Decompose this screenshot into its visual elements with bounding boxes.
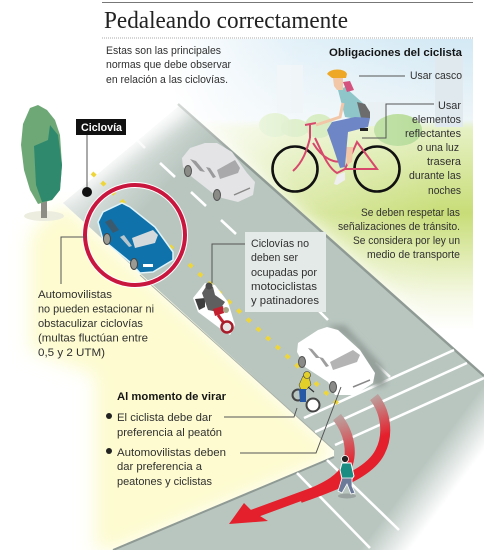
- text: traffic signals: [338, 207, 460, 261]
- text: motorists: Automovilistas: [38, 289, 112, 301]
- callout: bike lanes not for motorcycles: deben ser: [251, 252, 298, 264]
- road: [35, 85, 484, 550]
- label: reflective elements: o una luz: [417, 142, 459, 154]
- text: traffic signals: medio de transporte: [367, 249, 460, 261]
- pedestrian: [338, 456, 356, 498]
- intro text: normas que debe observar: [106, 59, 231, 71]
- tree: [21, 105, 64, 221]
- icon: bicycle frame: [293, 123, 377, 173]
- sidewalk: [30, 203, 334, 550]
- callout: bike lanes not for motorcycles: [245, 232, 326, 312]
- grey car: [182, 143, 255, 202]
- callout: bike lanes not for motorcycles: ocupadas por: [251, 267, 317, 279]
- intro text: [106, 45, 231, 86]
- heading: obligaciones del ciclista: Obligaciones del ciclista: [329, 47, 463, 59]
- label: reflective elements: trasera: [427, 156, 461, 168]
- leader lines: [61, 76, 434, 453]
- motorcycle rider: [193, 282, 235, 335]
- turn arrows: [229, 397, 385, 524]
- highlighted car in red circle: [85, 185, 185, 285]
- callout: bike lanes not for motorcycles: y patinadores: [251, 295, 319, 307]
- panel: at the moment of turning: Al momento de virar: [117, 391, 226, 403]
- cyclist: [292, 372, 320, 412]
- label: reflective elements: Usar: [438, 100, 461, 112]
- label: ciclovía: [76, 119, 126, 197]
- label: reflective elements: durante las: [409, 170, 461, 182]
- label: reflective elements: elementos: [412, 114, 461, 126]
- panel: at the moment of turning: dar preferencia a: [117, 461, 202, 473]
- text: motorists: obstaculizar ciclovías: [38, 318, 143, 330]
- lane dashes and crosswalk: [135, 138, 484, 548]
- panel: at the moment of turning: Automovilistas deben: [117, 447, 226, 459]
- bicycle with rider: [272, 70, 400, 192]
- icon: rider: [316, 70, 370, 185]
- bike lane dotted line: [92, 173, 339, 405]
- text: motorists: 0,5 y 2 UTM): [38, 347, 105, 359]
- panel: at the moment of turning: preferencia al peatón: [117, 427, 222, 439]
- callout: bike lanes not for motorcycles: Ciclovías no: [251, 238, 309, 250]
- callout: bike lanes not for motorcycles: motociclistas: [251, 281, 317, 293]
- icon: rear and front wheels: [272, 146, 400, 192]
- label: reflective elements: reflectantes: [405, 128, 461, 140]
- text: motorists: (multas fluctúan entre: [38, 332, 148, 344]
- label: usar casco: Usar casco: [410, 70, 462, 82]
- intro text: Estas son las principales: [106, 45, 221, 57]
- title: Pedaleando correctamente: [104, 8, 348, 34]
- text: traffic signals: señalizaciones de tránsito.: [338, 221, 460, 233]
- panel: at the moment of turning: peatones y ciclistas: [117, 476, 212, 488]
- text: motorists: [38, 289, 154, 359]
- label: reflective elements: [405, 100, 461, 197]
- white car: [297, 325, 387, 395]
- text: traffic signals: Se deben respetar las: [361, 207, 460, 219]
- background: sky and meadow: [175, 39, 473, 349]
- panel: at the moment of turning: [106, 391, 226, 488]
- label: reflective elements: noches: [428, 185, 461, 197]
- panel: at the moment of turning: El ciclista debe dar: [117, 412, 212, 424]
- text: motorists: no pueden estacionar ni: [38, 304, 154, 316]
- label: ciclovía: Ciclovía: [81, 122, 123, 134]
- text: traffic signals: Se considera por ley un: [353, 235, 460, 247]
- intro text: en relación a las ciclovías.: [106, 74, 228, 86]
